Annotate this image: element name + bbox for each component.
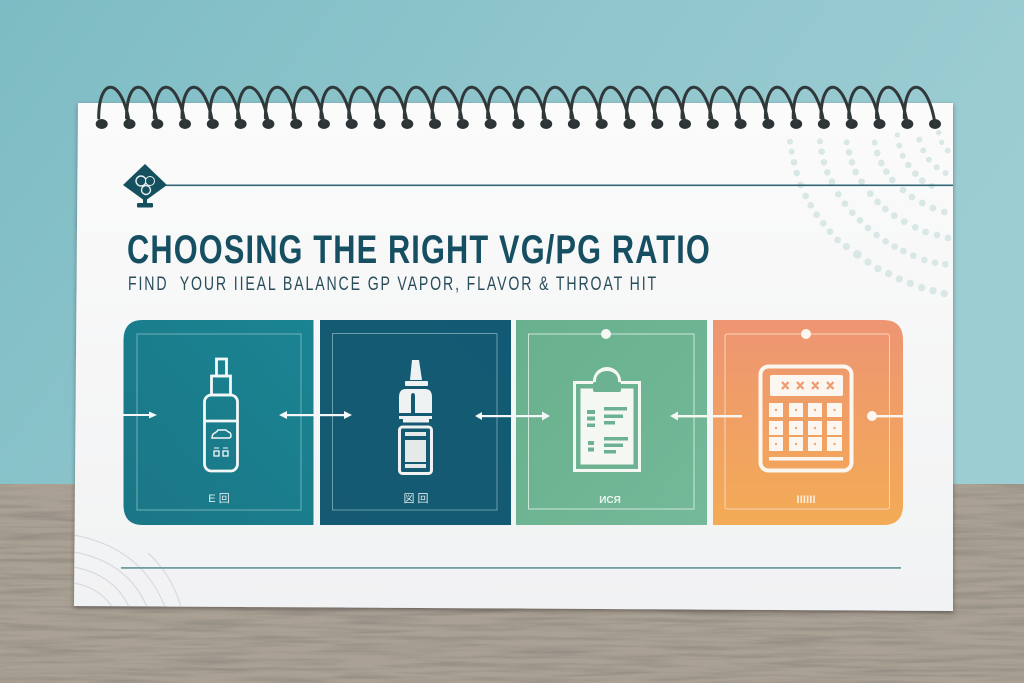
icon: spray bottle — [204, 359, 238, 471]
panel label: IIIIII — [796, 494, 816, 506]
icon: calculator — [760, 366, 852, 470]
panel: bottle step — [124, 320, 314, 525]
notebook page — [74, 103, 953, 611]
icon: clipboard — [574, 367, 640, 470]
panel label: E 回 — [208, 492, 230, 505]
spiral binding — [96, 87, 941, 129]
subtitle: FIND YOUR IIEAL BALANCE GP VAPOR, FLAVOR & THROAT HIT — [128, 274, 658, 295]
background: wooden table — [0, 484, 1024, 683]
icon: diamond logo — [123, 164, 167, 208]
panel: checklist step — [516, 320, 707, 525]
panel label: ИСЯ — [599, 495, 621, 506]
arrow: into panel 1 — [123, 412, 157, 418]
decoration: concentric arcs bottom left — [74, 535, 181, 607]
arrow: panel 2 to panel 3 — [475, 412, 550, 420]
header rule — [166, 184, 953, 186]
arrow: panel 1 to panel 2 — [279, 411, 352, 419]
icon: dropper bottle — [399, 360, 432, 474]
decoration: dotted arcs top right — [787, 130, 951, 297]
panel: calculator step — [713, 320, 903, 525]
title: CHOOSING THE RIGHT VG/PG RATIO — [127, 228, 711, 272]
background: teal wall — [0, 0, 1024, 486]
connector: calculator dot — [867, 411, 903, 421]
footer rule — [121, 567, 901, 569]
arrow: panel 4 to panel 3 — [670, 412, 742, 420]
panel label: 図 回 — [403, 492, 429, 505]
panel: dropper bottle step — [320, 320, 511, 525]
